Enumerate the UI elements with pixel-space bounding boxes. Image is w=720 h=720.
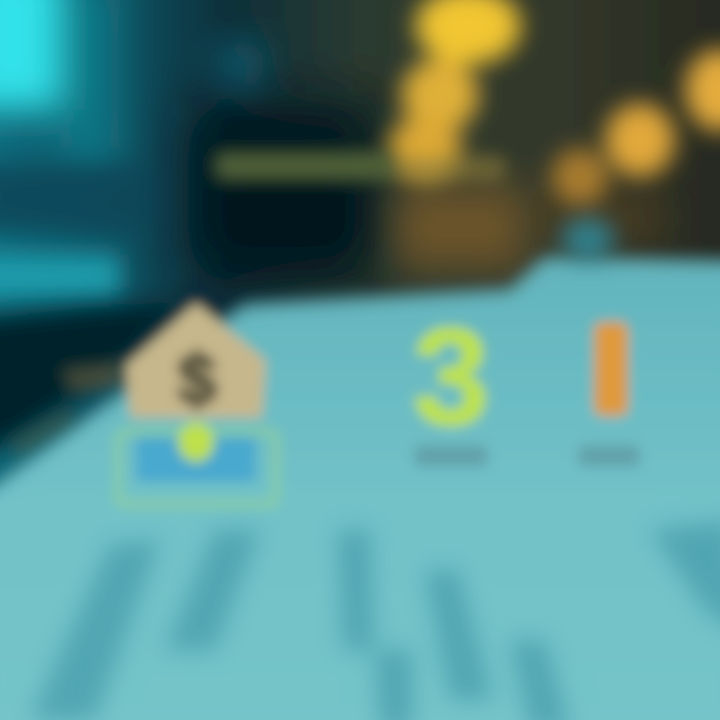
glow: cyan screen top left: [0, 0, 120, 170]
card: outlined blue box: [118, 422, 276, 504]
icon: house with dollar sign: $: [177, 340, 217, 420]
blurred heading line: [215, 152, 505, 180]
dark streaks in lower floor: [30, 520, 720, 720]
dark shadow centre: [190, 105, 380, 280]
bokeh lights: [389, 0, 720, 205]
brown haze under lights: [395, 185, 660, 270]
brown streak left: [10, 362, 125, 455]
stat: number 1: [594, 322, 628, 416]
glow: teal band left: [0, 165, 160, 297]
icon: house with dollar sign: [126, 303, 266, 420]
stat label under 1: [578, 445, 640, 467]
glow: small blue light: [214, 41, 266, 89]
stat: number 3: 3: [413, 300, 489, 454]
small teal marker: [562, 218, 614, 262]
dark left band: [0, 300, 190, 465]
stat label under 3: [414, 445, 488, 467]
floor panel: [0, 258, 720, 720]
